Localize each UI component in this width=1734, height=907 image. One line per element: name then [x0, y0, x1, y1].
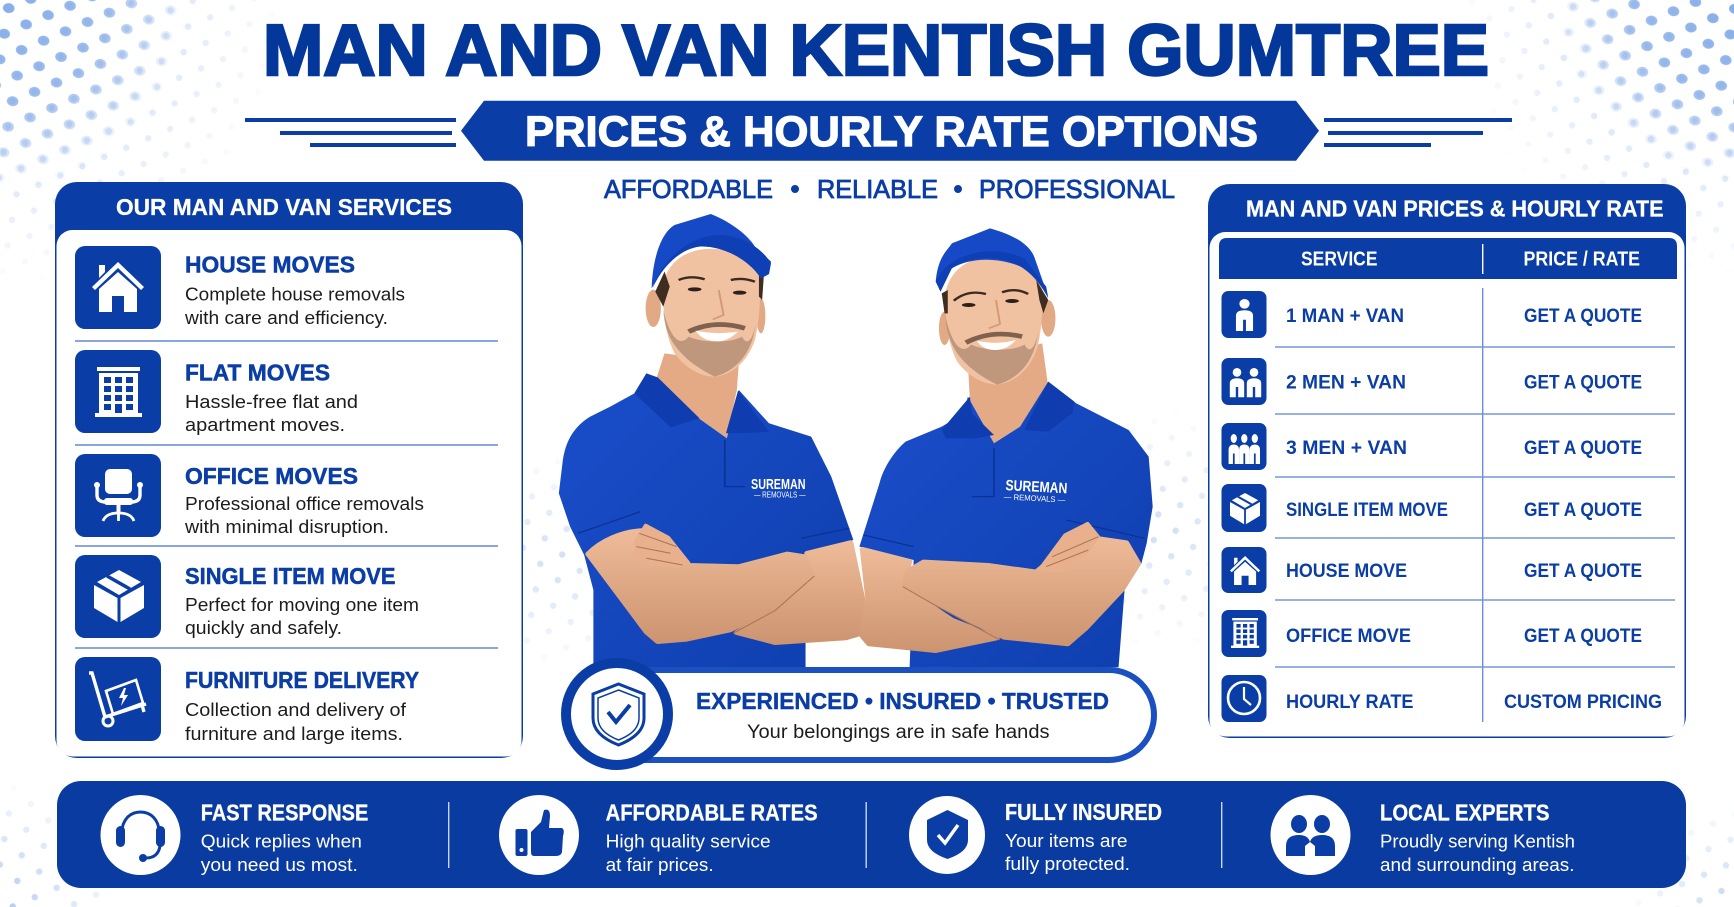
bottom benefits bar [57, 781, 1686, 888]
table header: PRICE / RATE [1524, 249, 1640, 271]
row: hourly rate: HOURLY RATE [1286, 692, 1414, 713]
tagline: AFFORDABLE [604, 176, 773, 204]
row: 2 men + van: GET A QUOTE [1524, 373, 1642, 394]
man two [859, 228, 1153, 667]
shirt logo right: SUREMAN [1005, 477, 1068, 497]
service: office moves: Professional office removals [185, 494, 424, 514]
man one [559, 214, 863, 667]
row: 3 men + van: 3 MEN + VAN [1286, 438, 1407, 459]
service: single item move: SINGLE ITEM MOVE [185, 563, 396, 589]
benefit: fast response: you need us most. [201, 855, 358, 875]
row: 2 men + van [1222, 358, 1642, 405]
shirt logo left: — REMOVALS — [754, 491, 806, 500]
service: house moves: with care and efficiency. [184, 308, 388, 328]
row: office move: OFFICE MOVE [1286, 626, 1411, 647]
benefit: fully insured: FULLY INSURED [1005, 799, 1162, 825]
row: 1 man + van: GET A QUOTE [1524, 306, 1642, 327]
row: single item move: GET A QUOTE [1524, 500, 1642, 521]
benefit: local experts: Proudly serving Kentish [1380, 832, 1575, 852]
benefit: fast response [100, 795, 368, 875]
tagline: RELIABLE [817, 176, 938, 204]
service: single item move: Perfect for moving one item [185, 595, 419, 615]
row: hourly rate [1222, 675, 1662, 722]
service: office moves: OFFICE MOVES [185, 463, 358, 489]
benefit: local experts: and surrounding areas. [1380, 855, 1574, 875]
benefit: affordable rates [499, 795, 818, 875]
panel: our services [55, 182, 523, 758]
tagline [604, 176, 1175, 204]
row: 1 man + van: 1 MAN + VAN [1286, 306, 1404, 327]
benefit: affordable rates: High quality service [606, 832, 771, 852]
service: flat moves: Hassle-free flat and [185, 392, 358, 412]
row: house move: GET A QUOTE [1524, 561, 1642, 582]
shirt logo right: — REMOVALS — [1004, 492, 1066, 505]
service: flat moves: FLAT MOVES [185, 360, 330, 386]
subtitle ribbon: PRICES & HOURLY RATE OPTIONS [525, 108, 1258, 156]
row: office move [1222, 610, 1642, 657]
row: hourly rate: CUSTOM PRICING [1504, 692, 1662, 713]
benefit: fully insured: fully protected. [1005, 854, 1130, 874]
benefit: affordable rates: at fair prices. [606, 855, 714, 875]
table header: SERVICE [1301, 249, 1378, 271]
trust badge: EXPERIENCED • INSURED • TRUSTED [696, 688, 1109, 714]
service: furniture delivery: Collection and delivery of [185, 700, 407, 720]
benefit: fully insured [909, 796, 1162, 874]
service: office moves: with minimal disruption. [184, 517, 389, 537]
tagline: PROFESSIONAL [979, 176, 1175, 204]
title: MAN AND VAN KENTISH GUMTREE [263, 11, 1489, 91]
speed lines right [1324, 118, 1512, 147]
row: 1 man + van [1222, 291, 1642, 338]
service: house moves: HOUSE MOVES [185, 252, 355, 278]
service: office moves [75, 454, 424, 537]
row: 2 men + van: 2 MEN + VAN [1286, 373, 1406, 394]
trust badge [566, 663, 1154, 765]
shirt logo left: SUREMAN [751, 476, 806, 493]
service: single item move: quickly and safely. [185, 618, 342, 638]
row: house move: HOUSE MOVE [1286, 561, 1407, 582]
benefit: fast response: Quick replies when [201, 832, 362, 852]
service: house moves [75, 246, 405, 329]
service: single item move [75, 555, 419, 638]
benefit: fast response: FAST RESPONSE [201, 800, 368, 826]
service: flat moves: apartment moves. [185, 415, 345, 435]
benefit: local experts [1270, 795, 1575, 875]
panel heading: OUR MAN AND VAN SERVICES [116, 194, 452, 220]
row: single item move: SINGLE ITEM MOVE [1286, 500, 1448, 521]
row: office move: GET A QUOTE [1524, 626, 1642, 647]
trust badge: Your belongings are in safe hands [747, 722, 1050, 743]
service: furniture delivery: furniture and large items. [185, 724, 403, 744]
benefit: affordable rates: AFFORDABLE RATES [606, 800, 818, 826]
benefit: local experts: LOCAL EXPERTS [1380, 800, 1550, 826]
service: house moves: Complete house removals [185, 285, 405, 305]
subtitle ribbon [461, 101, 1319, 161]
row: house move [1222, 547, 1642, 593]
row: 3 men + van [1222, 423, 1642, 470]
table header [1219, 238, 1677, 279]
row: 3 men + van: GET A QUOTE [1524, 438, 1642, 459]
shirt logo left [751, 476, 806, 500]
icon: shield [593, 684, 644, 745]
service: furniture delivery: FURNITURE DELIVERY [185, 667, 419, 693]
row: single item move [1222, 484, 1642, 532]
service: flat moves [75, 350, 358, 435]
shirt logo right [1004, 477, 1068, 505]
service: furniture delivery [75, 657, 419, 744]
panel: prices and hourly rate [1208, 184, 1686, 738]
benefit: fully insured: Your items are [1005, 831, 1128, 851]
illustration: two removal men [559, 214, 1153, 667]
speed lines left [245, 118, 456, 147]
panel heading: MAN AND VAN PRICES & HOURLY RATE [1246, 196, 1664, 222]
